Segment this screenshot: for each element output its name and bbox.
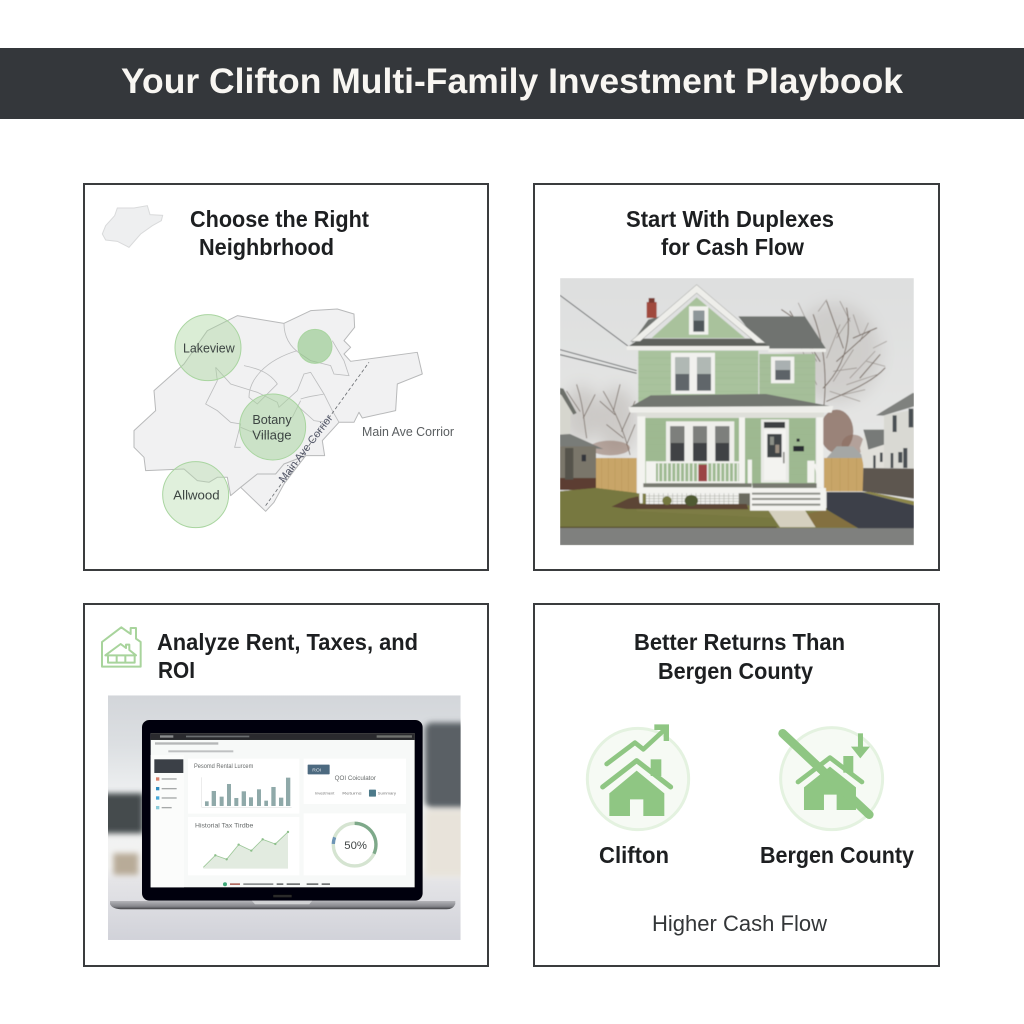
label: Clifton: Clifton: [599, 842, 669, 868]
neighborhood bubble: Lakeview: Lakeview: [183, 342, 235, 356]
heading: analyze rent, taxes and ROI: [157, 629, 418, 683]
front door: [761, 419, 789, 483]
label: Bergen County: Bergen County: [760, 842, 914, 868]
chimney: [647, 302, 657, 318]
label: Main Ave corridor: Main Ave Corrior: [362, 424, 455, 439]
map outline: [134, 309, 422, 511]
illustration: laptop with dashboard: [108, 696, 461, 940]
icon: Bergen County house declining: [781, 728, 883, 830]
porch roof: [628, 394, 832, 408]
lawn: [560, 488, 860, 528]
panel: start with duplexes: [534, 184, 939, 570]
donut gauge: 50%: [344, 840, 367, 852]
tax trends line chart: Historial Tax Tirdbe: [195, 824, 254, 830]
porch floor and lattice: [643, 483, 752, 487]
ROI calculator card: QOI Coiculator: [335, 776, 376, 782]
neighborhood bubble: Allwood: Allwood: [173, 487, 220, 502]
neighborhood bubble: Lakeview: [175, 315, 241, 381]
heading: start with duplexes: for Cash Flow: [661, 234, 804, 260]
ROI calculator card: Returns: [342, 791, 362, 796]
neighborhood bubble: Botany Village: Botany: [252, 412, 292, 427]
heading: choose the right neighborhood: Neighbrhood: [199, 234, 334, 260]
neighborhood bubble: Botany Village: [240, 394, 306, 460]
heading: choose the right neighborhood: Choose the Right: [190, 206, 369, 232]
ROI calculator card: [308, 764, 396, 797]
laptop base: [110, 895, 455, 909]
icon: small map silhouette: [102, 206, 163, 247]
laptop lid: [142, 720, 423, 901]
heading: better returns: Better Returns Than: [634, 629, 845, 655]
wood fences: [596, 458, 637, 493]
left neighbouring house: [560, 394, 568, 435]
panel: analyze rent, taxes and ROI: [84, 604, 488, 966]
porch windows: [666, 421, 734, 462]
status bar: [223, 882, 330, 886]
porch columns: [637, 416, 645, 488]
panel: choose the right neighborhood: [84, 184, 488, 570]
donut gauge: [332, 822, 378, 868]
ROI calculator card: Summary: [378, 791, 396, 796]
heading: analyze rent, taxes and ROI: ROI: [158, 657, 195, 683]
icon: outlined house: [102, 627, 141, 667]
title banner: [0, 48, 1024, 119]
icon: Clifton house rising: [587, 724, 689, 830]
laptop screen: [151, 733, 415, 887]
background trees: [790, 303, 880, 403]
heading: start with duplexes: Start With Duplexes: [626, 206, 834, 232]
heading: choose the right neighborhood: [190, 206, 369, 260]
rental income bar chart: Pesomd Rental Lurcem: [194, 764, 253, 770]
panel: better returns than Bergen County: [534, 604, 939, 966]
planting bed: [612, 496, 748, 509]
neighborhood bubble: Allwood: [163, 462, 229, 528]
heading: better returns: [634, 629, 845, 684]
railing: [646, 459, 816, 486]
heading: better returns: Bergen County: [658, 658, 813, 684]
map of Clifton neighborhoods: [134, 309, 422, 528]
neighborhood bubble: unnamed: [298, 329, 332, 363]
main house walls: [638, 351, 758, 404]
sidebar: [151, 755, 184, 887]
ROI calculator card: Investment: [315, 791, 335, 796]
neighborhood bubble: Botany Village: Village: [252, 428, 292, 443]
stone fence: [863, 468, 914, 499]
driveway: [827, 492, 914, 528]
upper windows: [671, 353, 715, 394]
rental income bar chart: [194, 764, 292, 808]
rotated corridor label: Main Ave Corrior: [277, 412, 336, 485]
overhead wires: [560, 295, 637, 373]
heading: analyze rent, taxes and ROI: Analyze Rent, Taxes, and: [157, 629, 418, 655]
roofs: [738, 316, 826, 349]
illustration: green duplex house: [560, 278, 914, 545]
attic window: [689, 306, 708, 335]
road: [560, 528, 914, 545]
title: Your Clifton Multi-Family Investment Playbook: [121, 62, 904, 101]
walkway: [768, 510, 816, 527]
caption: higher cash flow: Higher Cash Flow: [652, 911, 827, 936]
Main Ave corridor dashed line: [266, 362, 369, 506]
tax trends line chart: [196, 823, 290, 868]
heading: start with duplexes: [626, 206, 834, 260]
ROI calculator card: ROI: [312, 767, 321, 773]
right neighbouring houses: [860, 437, 884, 468]
steps: [750, 488, 826, 511]
